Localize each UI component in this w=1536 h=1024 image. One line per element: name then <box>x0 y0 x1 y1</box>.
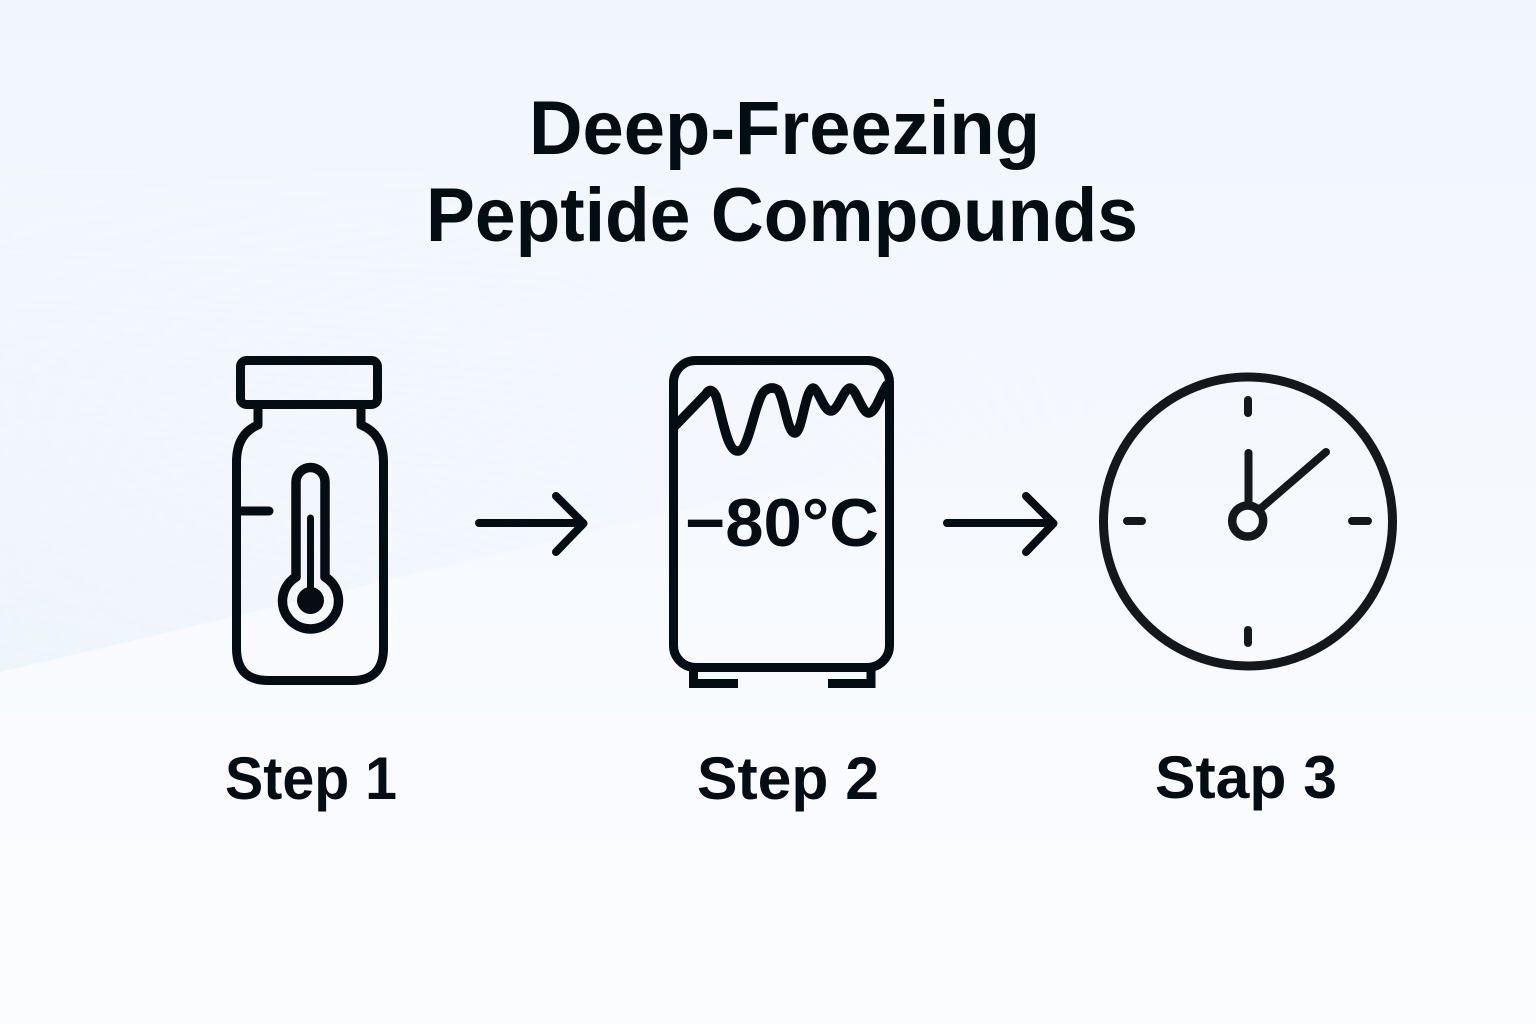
icon: freezer at -80°C <box>674 360 890 684</box>
arrow: step 1 to step 2 <box>479 496 584 552</box>
label: step 3: Stap 3 <box>1155 744 1337 811</box>
freezer temperature label: −80°C <box>685 485 879 561</box>
title <box>426 86 1138 258</box>
icon: clock <box>1104 377 1392 666</box>
title: Peptide Compounds <box>426 173 1138 258</box>
icon: vial with thermometer <box>236 360 384 680</box>
label: step 1: Step 1 <box>225 745 397 812</box>
title: Deep-Freezing <box>529 86 1040 171</box>
label: step 2: Step 2 <box>697 745 879 812</box>
arrow: step 2 to step 3 <box>947 496 1054 552</box>
